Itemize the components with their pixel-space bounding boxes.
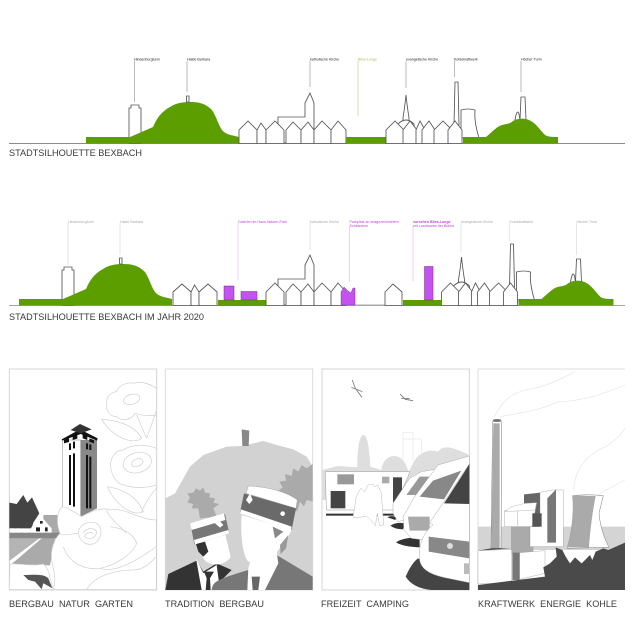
panel: Bergbau Natur Garten: [9, 369, 157, 590]
caption: Freizeit Camping: FREIZEIT CAMPING: [321, 599, 409, 609]
labels and leader lines: Hindenburgturm: [134, 58, 160, 62]
new development: galleries on green base: [218, 286, 266, 306]
labels and leader lines: Hindenburgturm: [68, 220, 94, 224]
icon: camper vans: [387, 456, 469, 590]
caption: Bergbau Natur Garten: BERGBAU NATUR GARTEN: [9, 599, 133, 609]
caption: Kraftwerk Energie Kohle: KRAFTWERK ENERGIE KOHLE: [478, 599, 617, 609]
labels and leader lines: Kohlekraftwerk: [510, 220, 533, 224]
labels and leader lines: vorsehen Blies-Lunge: [413, 220, 451, 224]
labels and leader lines: katholische Kirche: [310, 220, 339, 224]
coal heap foreground: [478, 543, 625, 590]
figures: [353, 484, 384, 526]
caption: Tradition Bergbau: TRADITION BERGBAU: [165, 599, 264, 609]
ground line: [9, 142, 625, 144]
figure: right miner: [212, 486, 313, 590]
town east with church, power plant and tower: [442, 244, 614, 306]
icon: gliders: [351, 380, 413, 401]
icon: power plant blocks: [504, 489, 563, 553]
background skyline: [322, 432, 469, 500]
icon: trees: [9, 495, 39, 528]
single house: [385, 284, 402, 306]
labels and leader lines: mit Landmarke der Bühne: [413, 224, 454, 228]
labels and leader lines: [134, 58, 542, 116]
labels and leader lines: [68, 220, 597, 282]
lower buildings: [478, 548, 545, 584]
landmark: Hindenburgturm: [129, 105, 141, 144]
labels and leader lines: Galerien im Haus-Natzen-Park: [238, 220, 287, 224]
labels and leader lines: katholische Kirche: [310, 58, 339, 62]
green bar: Bliesaue: [346, 137, 386, 144]
icon: farmhouse: [10, 516, 52, 533]
icon: chimney: [491, 419, 502, 548]
town east with church, power plant and tower: [386, 82, 558, 144]
smoke lines: [494, 372, 625, 495]
green hill: Halde Barbara: [19, 258, 172, 306]
town centre with catholic church: [266, 93, 346, 144]
silhouette: Bexbach in 2020: [9, 220, 625, 322]
new development: tower on green base: [403, 266, 441, 306]
heading: Stadtsilhouette Bexbach: STADTSILHOUETTE BEXBACH: [9, 148, 142, 158]
icon: cooling tower: [567, 495, 609, 548]
labels and leader lines: evangelische Kirche: [406, 58, 438, 62]
panel: Kraftwerk Energie Kohle: [478, 369, 625, 590]
town centre with catholic church: [266, 255, 346, 306]
icon: cap plumes: [187, 464, 313, 518]
green hill: Halde Barbara: [86, 96, 239, 144]
icon: monument on hill: [242, 429, 249, 446]
labels and leader lines: Halde Barbara: [187, 58, 210, 62]
icon: flowers: [102, 382, 157, 513]
caravan: [325, 472, 410, 516]
labels and leader lines: Parkplatz an ausgezeichnetem: [350, 220, 399, 224]
icon: rose: [9, 507, 156, 590]
icon: mining tower: [62, 424, 98, 517]
labels and leader lines: Blies-Lungs: [358, 58, 377, 62]
hill background: [165, 441, 313, 590]
panel: Tradition Bergbau: [165, 369, 313, 590]
silhouette: Bexbach today: [9, 58, 625, 158]
labels and leader lines: Kohlekraftwerk: [454, 58, 478, 62]
labels and leader lines: Halde Barbara: [120, 220, 143, 224]
labels and leader lines: Höcher Turm: [576, 220, 597, 224]
landmark: Hindenburgturm: [62, 267, 74, 306]
landscape fields: [9, 515, 60, 565]
labels and leader lines: Höcher Turm: [521, 58, 542, 62]
heading: Stadtsilhouette Bexbach im Jahr 2020: STADTSILHOUETTE BEXBACH IM JAHR 2020: [9, 312, 204, 322]
horizon band: [478, 527, 625, 550]
labels and leader lines: evangelische Kirche: [461, 220, 493, 224]
ground line: [9, 304, 625, 306]
new development: car park building: [341, 287, 385, 306]
houses west group: [173, 284, 217, 306]
labels and leader lines: Schätzchen: [350, 224, 368, 228]
houses left group: [239, 121, 266, 144]
panel: Freizeit Camping: [322, 369, 469, 590]
figure: left miner: [165, 513, 232, 590]
